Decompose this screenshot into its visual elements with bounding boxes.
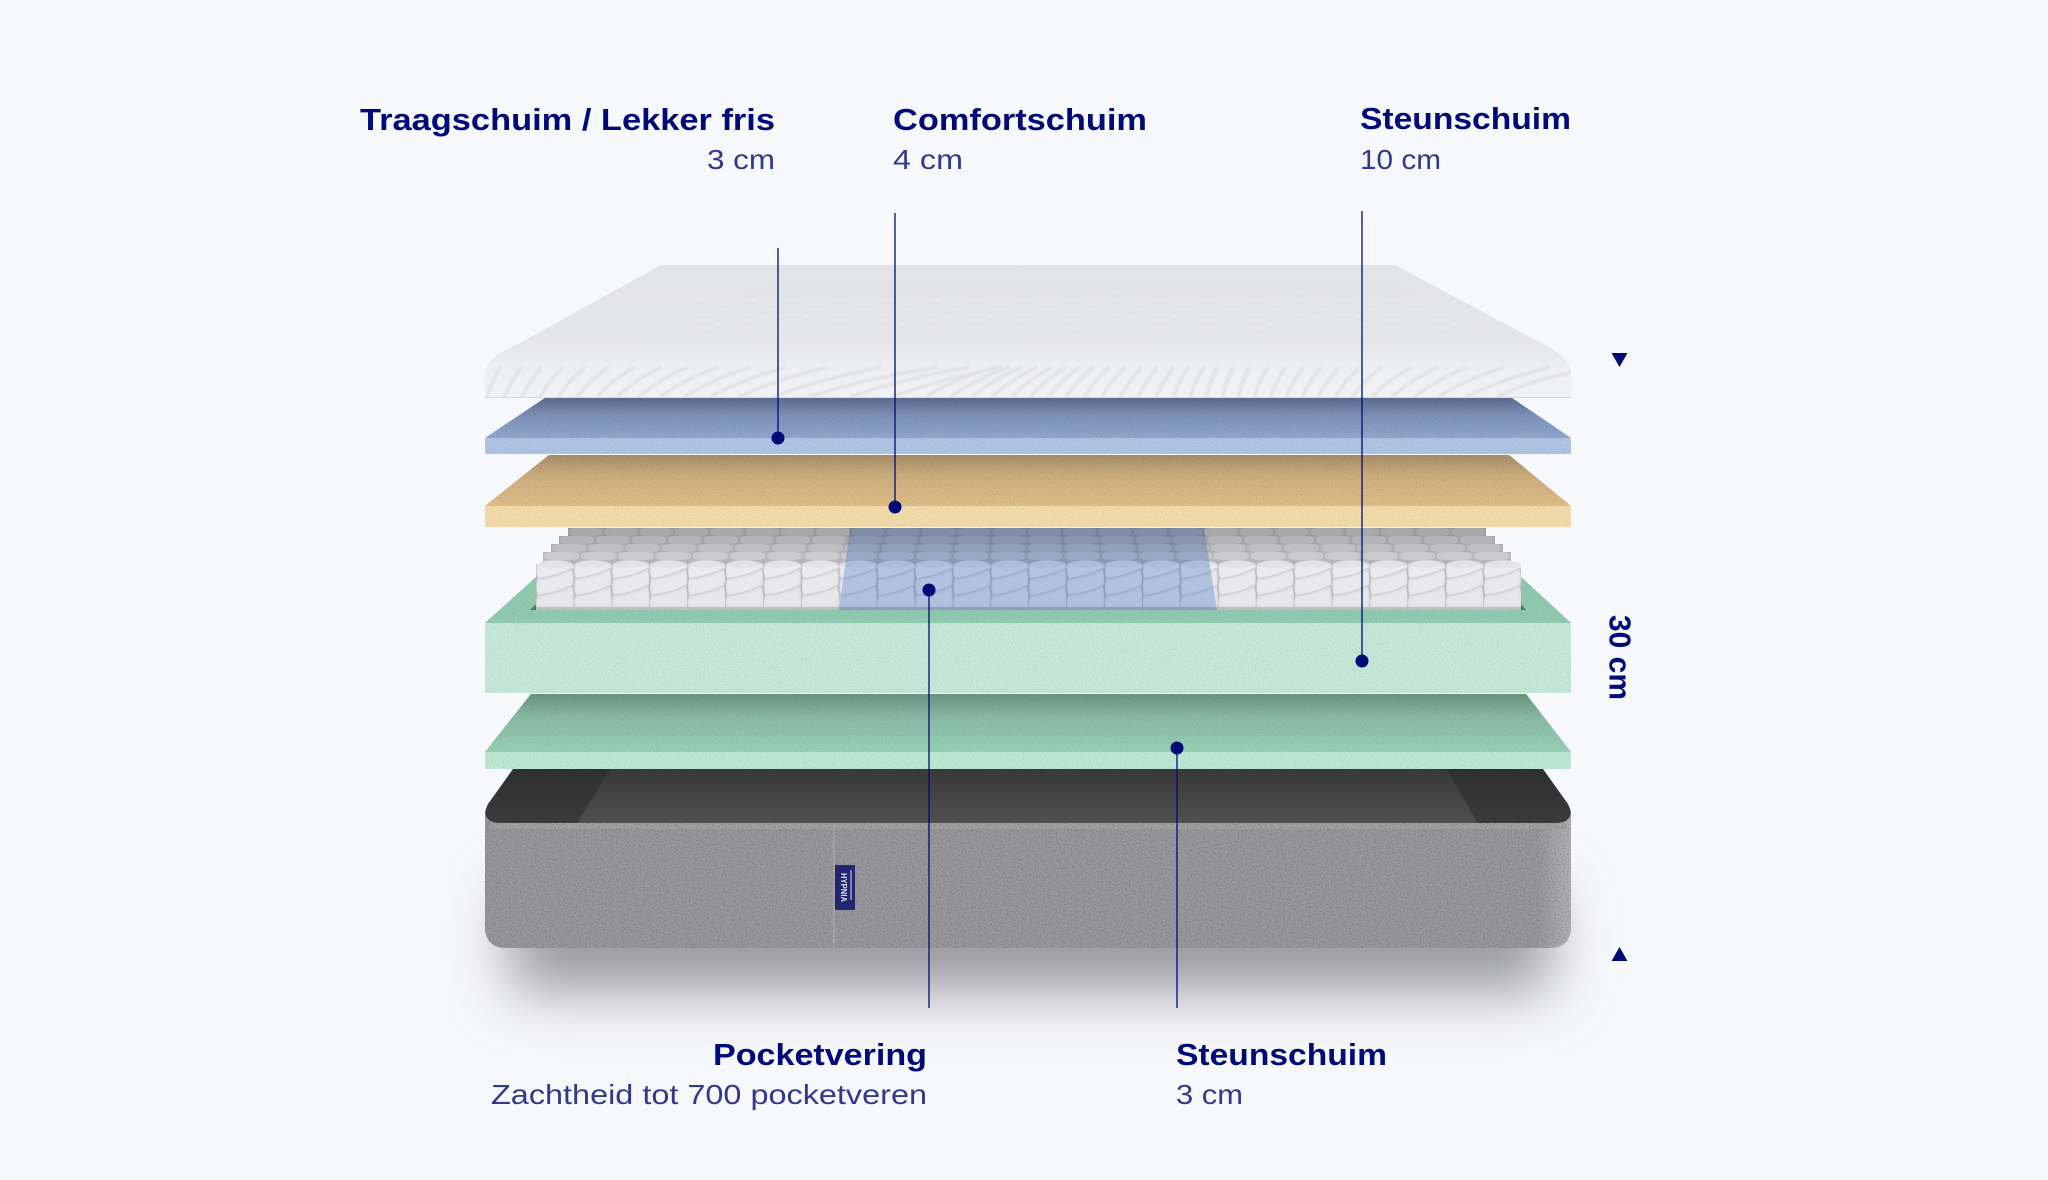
callout: Comfortschuim: 4 cm bbox=[893, 144, 963, 175]
floor shadow bbox=[510, 890, 1550, 990]
total height dimension bbox=[1602, 353, 1638, 961]
base: grey fabric cover bbox=[485, 812, 1571, 948]
total height dimension: 30 cm bbox=[1602, 615, 1638, 700]
pocket springs bbox=[536, 528, 1521, 610]
infographic: mattress layers bbox=[360, 107, 1631, 1110]
callout: Steunschuim 3 cm: 3 cm bbox=[1176, 1079, 1243, 1110]
layer: green support foam 3 cm bbox=[485, 694, 1571, 769]
base: dark inner tray bbox=[485, 769, 1571, 824]
callout: Steunschuim 10 cm bbox=[1356, 101, 1571, 668]
callout: Traagschuim: Traagschuim / Lekker fris bbox=[360, 102, 775, 137]
mattress illustration bbox=[485, 265, 1571, 990]
callout: Comfortschuim bbox=[888, 102, 1147, 514]
callout: Steunschuim 3 cm bbox=[1170, 742, 1387, 1110]
callout: Pocketvering bbox=[491, 584, 936, 1110]
callout: Comfortschuim: Comfortschuim bbox=[893, 102, 1147, 137]
callout: Pocketvering: Pocketvering bbox=[713, 1037, 927, 1072]
brand label bbox=[835, 865, 855, 910]
callout: Steunschuim 3 cm: Steunschuim bbox=[1176, 1037, 1387, 1072]
layer: blue foam bbox=[485, 398, 1571, 454]
layer: tan comfort foam bbox=[485, 455, 1571, 527]
callout: Steunschuim 10 cm: 10 cm bbox=[1360, 144, 1441, 175]
callout: Pocketvering: Zachtheid tot 700 pocketveren bbox=[491, 1079, 927, 1110]
callout: Steunschuim 10 cm: Steunschuim bbox=[1360, 101, 1571, 136]
callout: Traagschuim bbox=[360, 102, 784, 444]
layer: green support foam 10 cm bbox=[485, 577, 1571, 693]
callout: Traagschuim: 3 cm bbox=[707, 144, 775, 175]
layer: top foam bbox=[485, 265, 1571, 398]
blue spring zone bbox=[839, 528, 1217, 610]
brand label: HYPNIA bbox=[839, 873, 849, 902]
